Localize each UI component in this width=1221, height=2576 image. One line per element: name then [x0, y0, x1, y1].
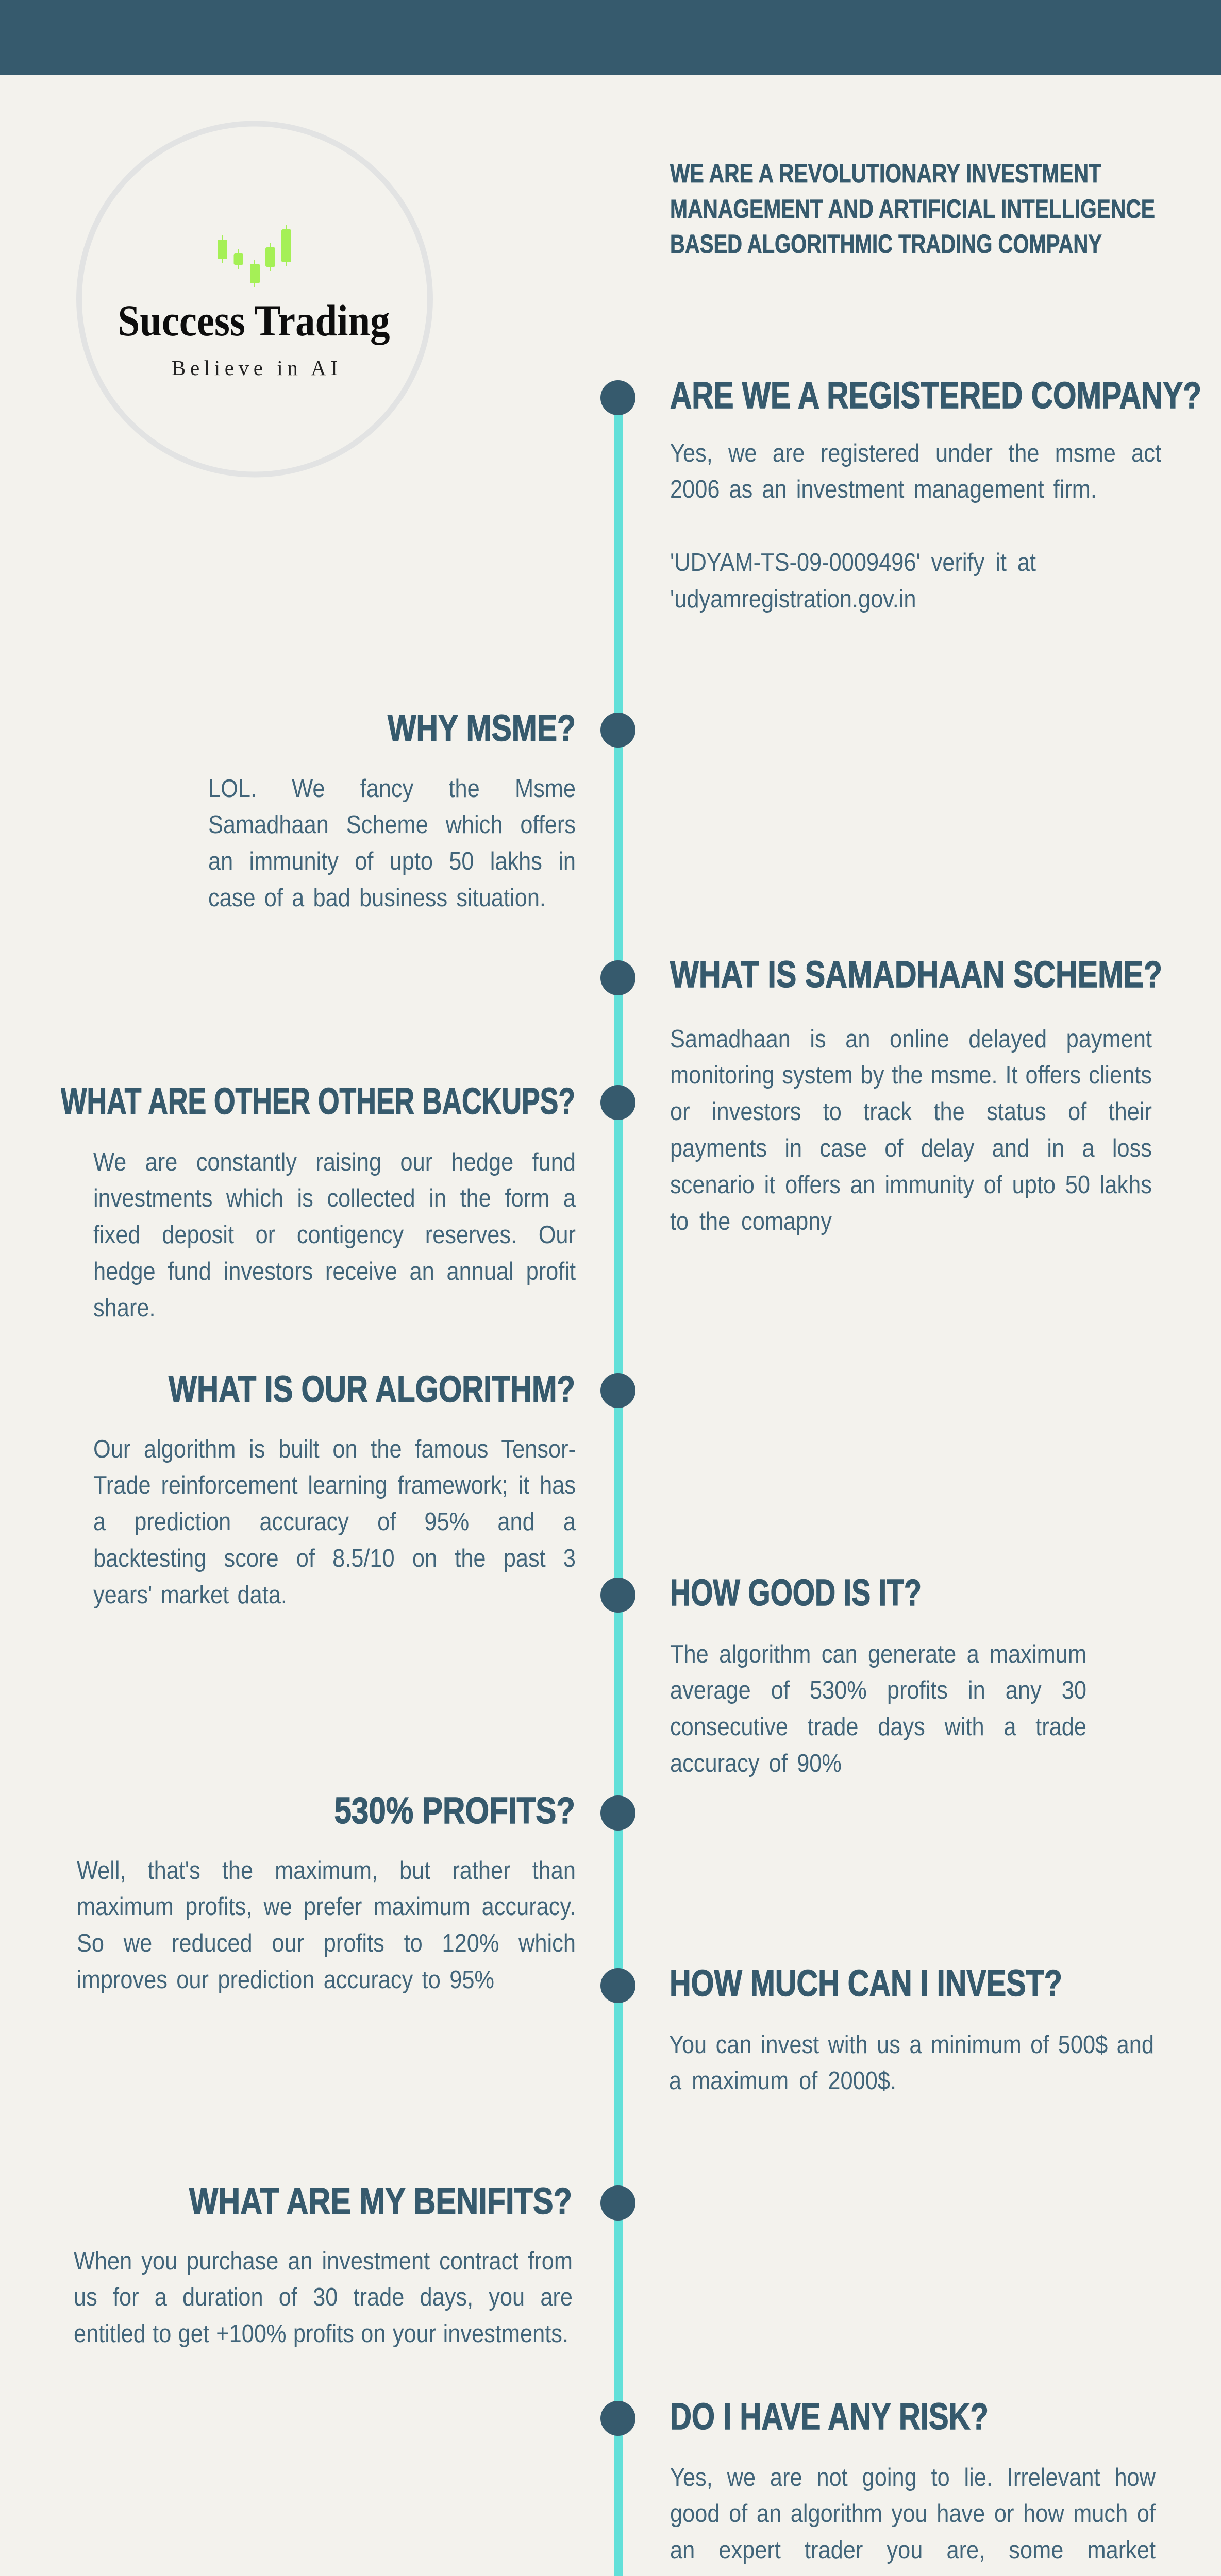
timeline — [600, 380, 635, 2576]
body text — [670, 1640, 1086, 1777]
body text: accuracy of 90% — [670, 1750, 842, 1777]
body text: or investors to track the status of their — [670, 1098, 1152, 1126]
logo tagline: Believe in AI — [172, 356, 338, 380]
dot: risk — [600, 2401, 635, 2436]
panel: do i have any risk — [670, 2401, 1156, 2576]
body text: LOL. We fancy the Msme — [208, 775, 576, 803]
body text: average of 530% profits in any 30 — [670, 1676, 1086, 1704]
body text: investments which is collected in the form a — [93, 1184, 576, 1212]
body text: Our algorithm is built on the famous Tensor- — [93, 1435, 576, 1463]
intro statement — [670, 160, 1155, 259]
body text: entitled to get +100% profits on your investments. — [74, 2320, 568, 2348]
body text: years' market data. — [93, 1581, 287, 1609]
body text: a maximum of 2000$. — [669, 2067, 896, 2095]
body text — [670, 2464, 1156, 2576]
body text: payments in case of delay and in a loss — [670, 1134, 1152, 1162]
body text: When you purchase an investment contract from — [74, 2247, 573, 2275]
body text — [670, 439, 1161, 613]
dot: benefits — [600, 2185, 635, 2221]
body text — [669, 2031, 1154, 2095]
logo ring — [79, 124, 430, 474]
logo: Success Trading badge — [76, 121, 433, 477]
body text: hedge fund investors receive an annual profit — [93, 1258, 576, 1285]
dot: why msme — [600, 713, 635, 748]
dot: how much invest — [600, 1968, 635, 2003]
body text: We are constantly raising our hedge fund — [93, 1148, 576, 1176]
body text: case of a bad business situation. — [208, 884, 546, 912]
body text: fixed deposit or contigency reserves. Our — [93, 1221, 576, 1249]
body text — [670, 1025, 1152, 1235]
dot: samadhaan scheme — [600, 960, 635, 995]
body text: good of an algorithm you have or how much of — [670, 2500, 1156, 2528]
body text — [74, 2247, 573, 2348]
panel: what is samadhaan scheme — [670, 959, 1162, 1235]
body text: Samadhaan is an online delayed payment — [670, 1025, 1152, 1053]
body text: a prediction accuracy of 95% and a — [93, 1508, 576, 1536]
body text: us for a duration of 30 trade days, you are — [74, 2283, 573, 2311]
body text: So we reduced our profits to 120% which — [77, 1929, 576, 1957]
panel: how much can i invest — [669, 1968, 1154, 2095]
body text: an expert trader you are, some market — [670, 2536, 1156, 2564]
body text: an immunity of upto 50 lakhs in — [208, 848, 576, 875]
dot: 530% profits — [600, 1795, 635, 1831]
body text: Yes, we are registered under the msme act — [670, 439, 1161, 467]
panel: are we a registered company — [670, 380, 1201, 613]
body text: 'udyamregistration.gov.in — [670, 585, 916, 613]
body text: monitoring system by the msme. It offers clients — [670, 1061, 1152, 1089]
body text: 'UDYAM-TS-09-0009496' verify it at — [670, 549, 1036, 577]
body text: maximum profits, we prefer maximum accuracy. — [77, 1893, 576, 1921]
body text: improves our prediction accuracy to 95% — [77, 1966, 494, 1994]
dot: other backups — [600, 1085, 635, 1120]
dot: registered company — [600, 380, 635, 415]
top banner — [0, 0, 1221, 75]
panel: 530% profits — [77, 1795, 576, 1994]
panel: how good is it — [670, 1577, 1086, 1777]
logo name: Success Trading — [118, 296, 390, 345]
body text: backtesting score of 8.5/10 on the past 3 — [93, 1545, 576, 1572]
body text: 2006 as an investment management firm. — [670, 476, 1097, 503]
panel: why msme — [208, 713, 576, 912]
timeline line — [614, 398, 623, 2576]
body text: consecutive trade days with a trade — [670, 1713, 1086, 1741]
body text: to the comapny — [670, 1208, 832, 1235]
body text: Trade reinforcement learning framework; it has — [93, 1471, 576, 1499]
body text: Samadhaan Scheme which offers — [208, 811, 576, 839]
panel: what is our algorithm — [93, 1374, 576, 1609]
body text: Well, that's the maximum, but rather than — [77, 1857, 576, 1885]
body text: You can invest with us a minimum of 500$ and — [669, 2031, 1154, 2059]
body text: scenario it offers an immunity of upto 50 lakhs — [670, 1171, 1152, 1199]
body text — [93, 1435, 576, 1609]
panel: what are my benifits — [74, 2185, 573, 2348]
body text — [208, 775, 576, 912]
body text: Yes, we are not going to lie. Irrelevant how — [670, 2464, 1156, 2492]
body text: The algorithm can generate a maximum — [670, 1640, 1086, 1668]
body text — [77, 1857, 576, 1994]
body text — [93, 1148, 576, 1322]
body text: share. — [93, 1294, 156, 1322]
panel: what are other other backups — [61, 1086, 576, 1322]
icon: candlesticks — [218, 225, 291, 287]
dot: how good — [600, 1578, 635, 1613]
dot: our algorithm — [600, 1373, 635, 1408]
